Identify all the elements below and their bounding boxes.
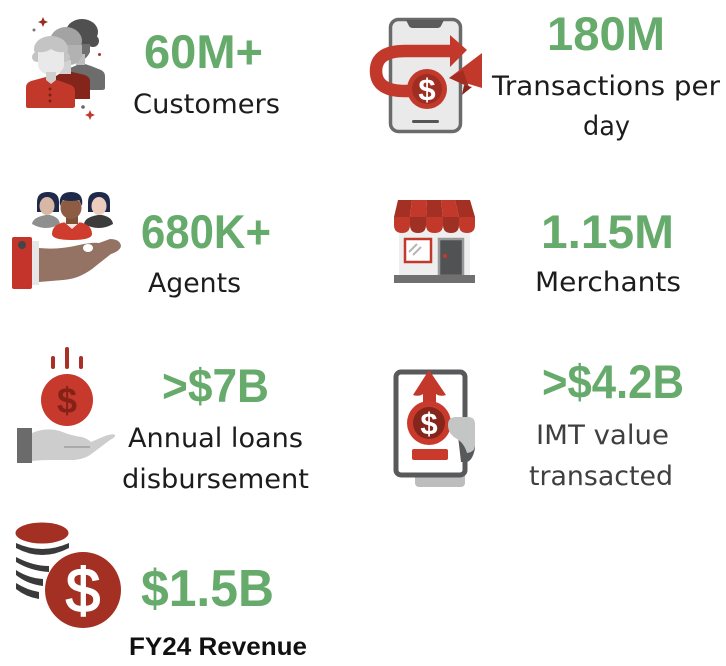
stat: transactions per day xyxy=(491,7,721,142)
icon: loan coin over hand xyxy=(17,347,115,463)
icon: coin stack: $ xyxy=(66,557,100,626)
stat: IMT value transacted: transacted xyxy=(529,461,673,492)
stat: IMT value transacted: >$4.2B xyxy=(542,355,684,408)
stat: transactions per day: 180M xyxy=(547,7,665,60)
stat: transactions per day: Transactions per xyxy=(491,71,721,102)
stat: merchants: Merchants xyxy=(535,267,681,298)
stat: annual loans disbursement: Annual loans xyxy=(128,423,303,454)
stat: FY24 revenue: $1.5B xyxy=(141,560,274,618)
stat: IMT value transacted: IMT value xyxy=(536,420,669,451)
stat: customers: 60M+ xyxy=(144,25,263,78)
icon: coin stack xyxy=(16,522,121,628)
stat: customers xyxy=(133,25,280,120)
stat: merchants: 1.15M xyxy=(541,205,674,258)
icon: loan coin over hand: $ xyxy=(57,380,77,421)
stat: agents: 680K+ xyxy=(141,205,271,258)
stat: transactions per day: day xyxy=(583,111,630,142)
stat: annual loans disbursement: >$7B xyxy=(162,359,269,412)
icon: merchant shop xyxy=(394,200,475,283)
icon: international money transfer phone xyxy=(396,370,475,487)
stat: IMT value transacted xyxy=(529,355,684,492)
icon: customers group xyxy=(26,17,105,120)
stat: annual loans disbursement xyxy=(122,359,309,495)
stat: customers: Customers xyxy=(133,89,280,120)
icon: agents on hand xyxy=(12,192,121,289)
icon: phone transactions: $ xyxy=(418,72,436,107)
icon: international money transfer phone: $ xyxy=(420,406,438,441)
stat: agents xyxy=(141,205,271,299)
stat: merchants xyxy=(535,205,681,298)
icon: phone transactions xyxy=(376,20,482,132)
stat: FY24 revenue xyxy=(129,560,307,661)
stat: agents: Agents xyxy=(148,268,241,299)
stat: annual loans disbursement: disbursement xyxy=(122,464,309,495)
stat: FY24 revenue: FY24 Revenue xyxy=(129,633,307,661)
